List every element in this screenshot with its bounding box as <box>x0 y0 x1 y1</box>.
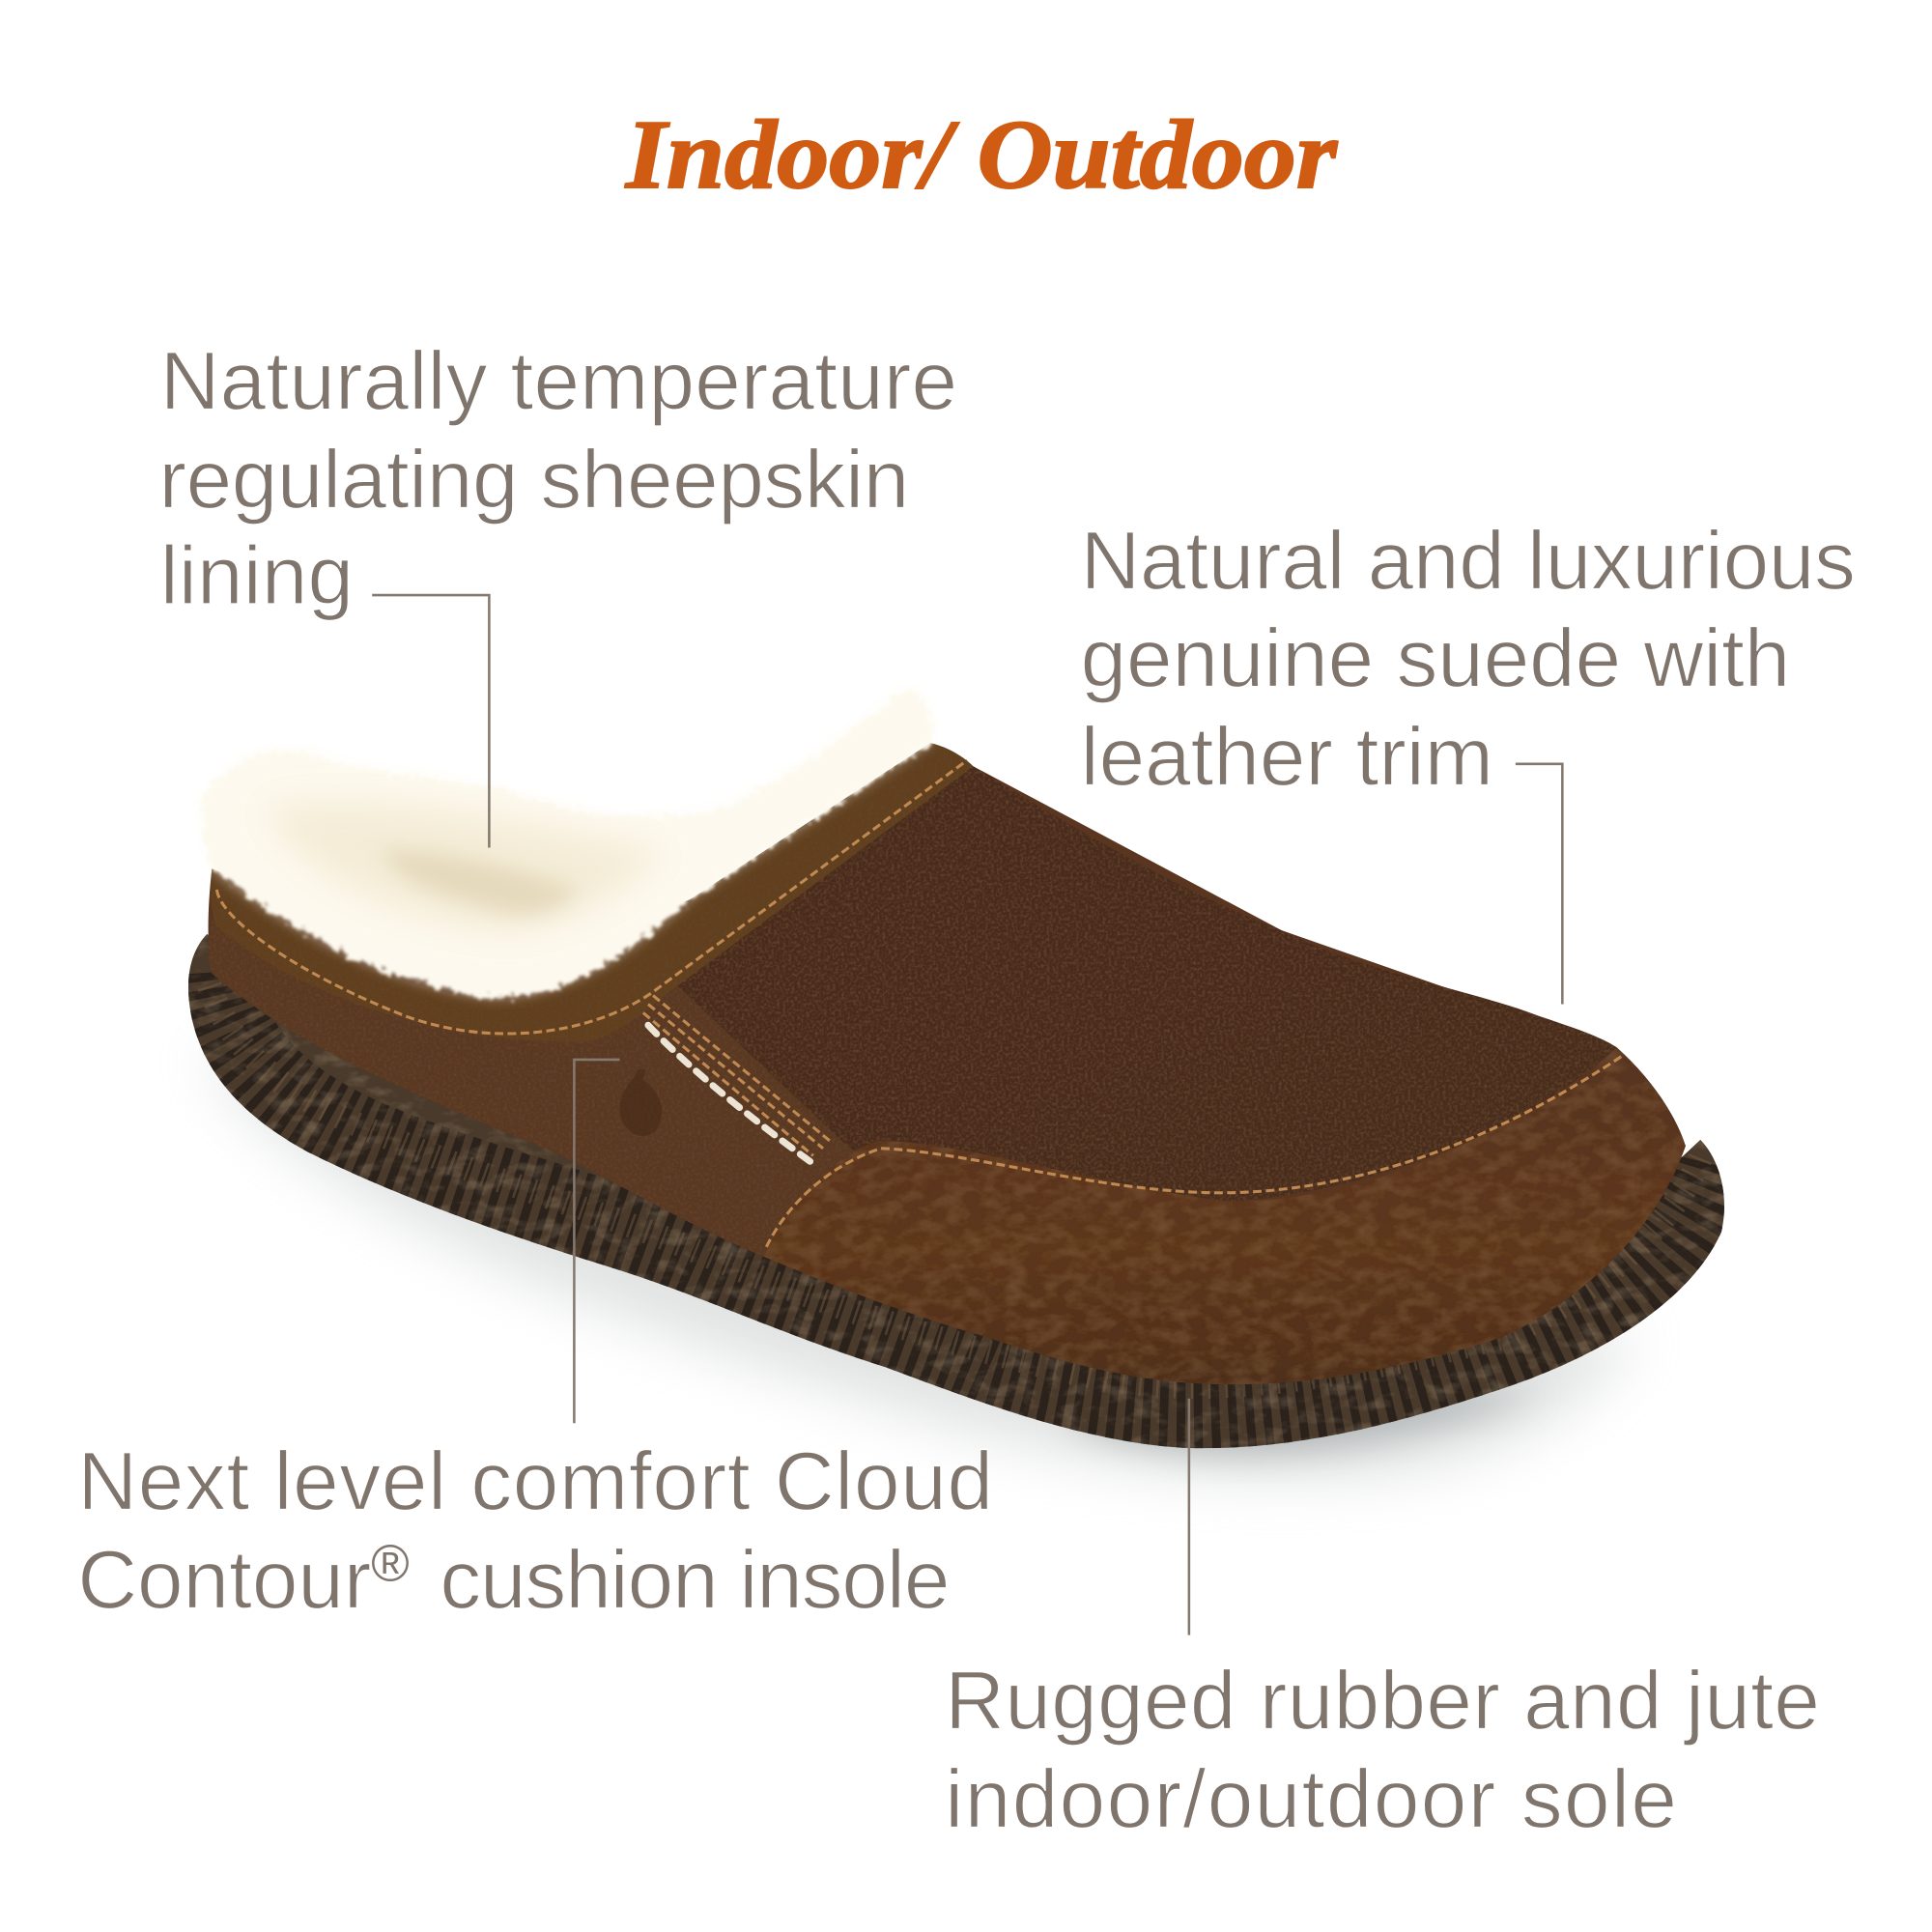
callout text: Natural and luxurious <box>1081 516 1856 608</box>
leader line <box>372 595 489 848</box>
callout text: indoor/outdoor sole <box>945 1754 1677 1846</box>
white saddle stitching <box>648 1025 810 1162</box>
callout text: Contour <box>77 1535 371 1627</box>
product photo: slipper <box>173 688 1749 1478</box>
callout text <box>1081 516 1856 803</box>
callout: insole <box>77 1060 993 1627</box>
suede side quarter <box>209 918 856 1257</box>
suede collar trim <box>211 743 974 1041</box>
leader line <box>1188 1399 1190 1635</box>
callout text <box>945 1656 1820 1846</box>
callout: suede upper <box>1081 516 1856 1005</box>
callout text: regulating sheepskin <box>159 435 909 526</box>
title: Indoor/ Outdoor <box>625 100 1338 210</box>
callout text: genuine suede with <box>1081 612 1790 704</box>
callout: sole <box>945 1399 1820 1846</box>
callout text: Naturally temperature <box>160 335 957 427</box>
leather toe band <box>764 1047 1686 1384</box>
callout: sheepskin lining <box>159 335 957 848</box>
rubber and jute sole <box>173 912 1749 1466</box>
leader line <box>1516 764 1562 1005</box>
upper base silhouette <box>209 743 1686 1384</box>
callout text: Next level comfort Cloud <box>77 1436 993 1527</box>
callout text <box>77 1435 993 1627</box>
shadow under toe <box>1060 1380 1540 1454</box>
dark suede vamp <box>678 766 1616 1202</box>
debossed acorn logo <box>620 1069 662 1136</box>
callout text <box>159 335 957 622</box>
lining soft cream interior <box>265 802 666 931</box>
lining inner shading <box>382 850 579 915</box>
leader line <box>574 1060 620 1423</box>
callout text: lining <box>160 530 354 622</box>
sheepskin lining <box>201 688 932 998</box>
callout text: cushion insole <box>440 1535 950 1627</box>
callout text: leather trim <box>1081 711 1493 803</box>
ground shadow <box>203 1047 1638 1478</box>
callout text: ® <box>371 1535 410 1592</box>
contrast stitching <box>216 760 1624 1247</box>
callout text: Rugged rubber and jute <box>945 1656 1820 1747</box>
